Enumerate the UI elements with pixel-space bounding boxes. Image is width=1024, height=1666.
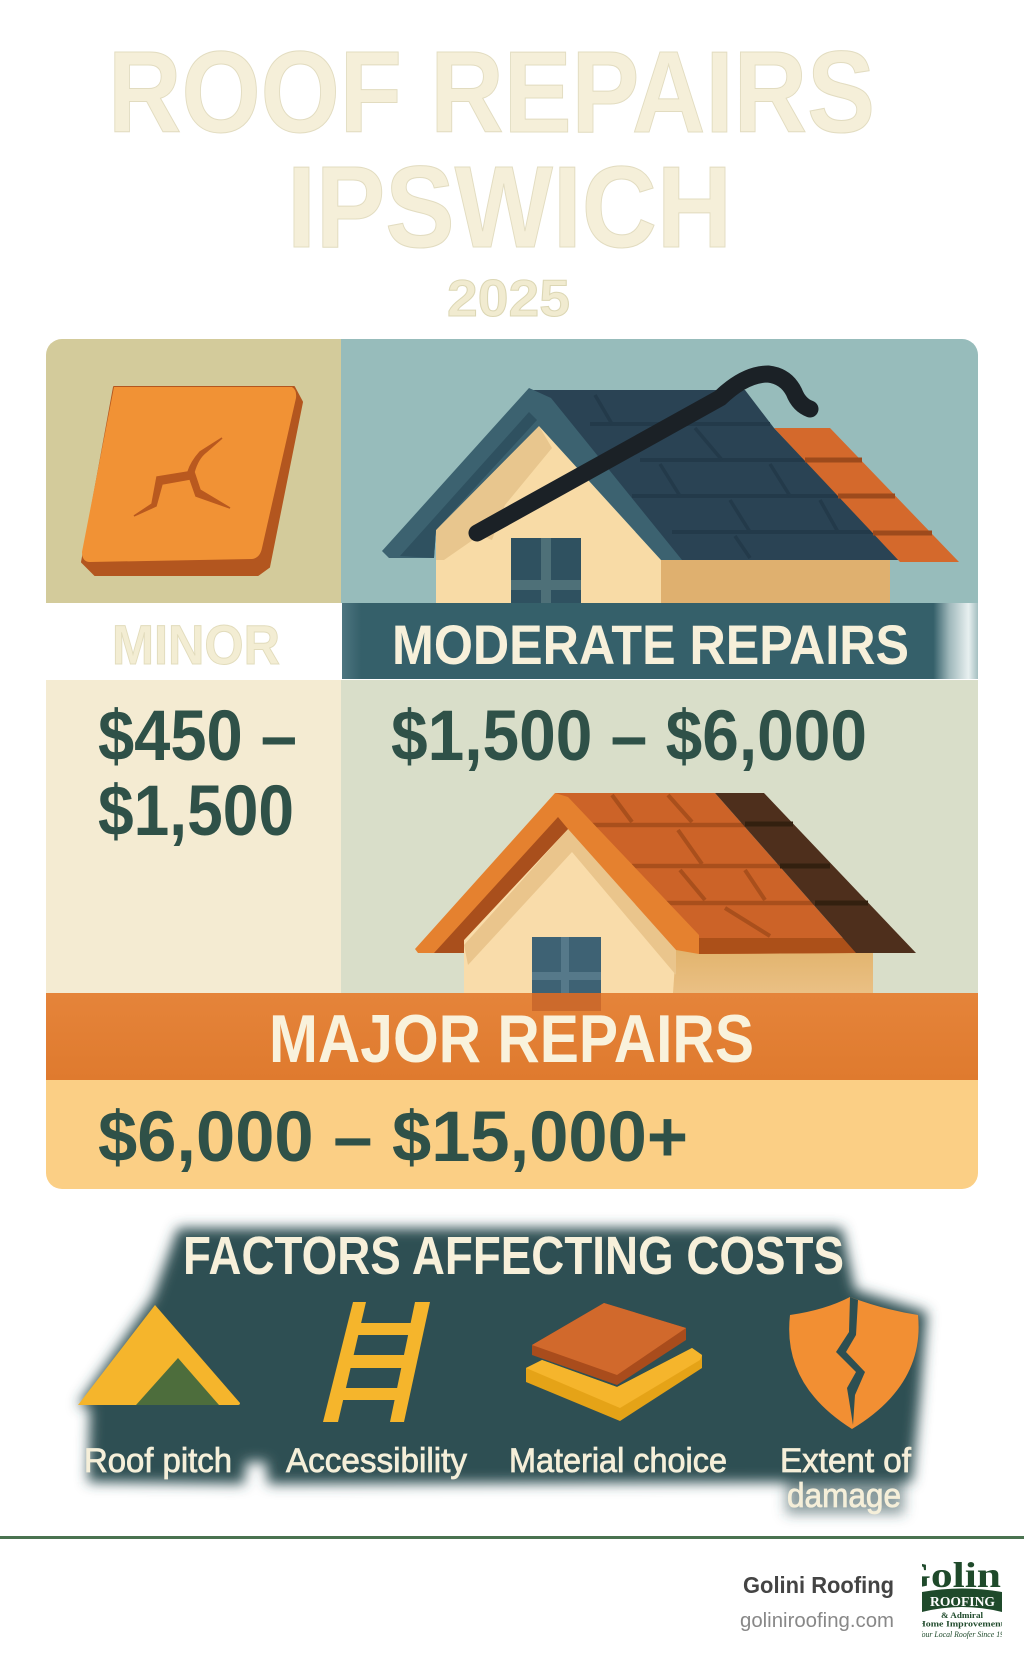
door [511, 538, 581, 603]
panel: major price background [46, 1080, 978, 1190]
dark roof strip [715, 793, 916, 953]
orange roof strip [774, 428, 959, 562]
logo [922, 1562, 1002, 1639]
panel: factors background [78, 1228, 927, 1514]
logo: Your Local Roofer Since 19 [918, 1630, 1004, 1639]
factor labels: Accessibility [286, 1442, 467, 1480]
price: moderate: $1,500 – $6,000 [391, 697, 867, 776]
roof [555, 793, 856, 954]
crowbar [477, 374, 810, 533]
factor labels [84, 1442, 912, 1515]
panel: repair cost grid [46, 339, 978, 1190]
door [532, 937, 601, 993]
banner: major repairs: MAJOR REPAIRS [269, 1001, 754, 1077]
logo: ROOFING [930, 1595, 995, 1610]
panel: minor image background [46, 339, 341, 603]
icon: roof pitch [78, 1305, 240, 1405]
front wall [464, 829, 676, 993]
title: IPSWICH [287, 142, 732, 272]
dark roof [529, 390, 900, 560]
price: minor: $1,500 [98, 772, 294, 851]
icon: cracked tile [82, 387, 302, 575]
icon: cracked shield [789, 1297, 919, 1429]
price: minor: $450 – [98, 697, 297, 776]
panel: moderate image background [341, 339, 978, 603]
price: major: $6,000 – $15,000+ [98, 1098, 688, 1177]
title: ROOF REPAIRS [108, 27, 875, 157]
factor labels: Material choice [509, 1442, 727, 1480]
icon: house with dark roof and crowbar [382, 374, 959, 603]
footer rule [0, 1536, 1024, 1539]
footer brand text: Golini Roofing [743, 1572, 894, 1598]
logo: Home Improvement [918, 1618, 1004, 1628]
fascia [382, 388, 682, 560]
footer brand text [740, 1572, 894, 1632]
logo: & Admiral [941, 1610, 984, 1620]
label: minor: MINOR [112, 613, 280, 676]
icon: material tiles [526, 1303, 702, 1421]
front wall [436, 426, 661, 603]
banner: moderate repairs: MODERATE REPAIRS [392, 613, 909, 676]
factor labels: damage [787, 1477, 901, 1515]
logo: Golin [897, 1555, 1001, 1595]
factor labels: Extent of [780, 1442, 912, 1480]
icon: ladder [323, 1302, 430, 1422]
year: 2025 [447, 270, 570, 328]
fascia [415, 793, 699, 954]
icon: house with orange roof [415, 793, 916, 993]
heading: factors affecting costs: FACTORS AFFECTING COSTS [183, 1226, 844, 1286]
banner: major repairs [46, 993, 978, 1080]
panel: moderate price background [341, 680, 978, 993]
price: minor [98, 707, 295, 846]
title [108, 27, 875, 272]
footer brand text: goliniroofing.com [740, 1610, 894, 1632]
factor labels: Roof pitch [84, 1442, 232, 1480]
right wall [661, 560, 890, 603]
right wall [673, 950, 873, 993]
label: minor background [46, 603, 341, 679]
panel: minor price background [46, 680, 341, 993]
